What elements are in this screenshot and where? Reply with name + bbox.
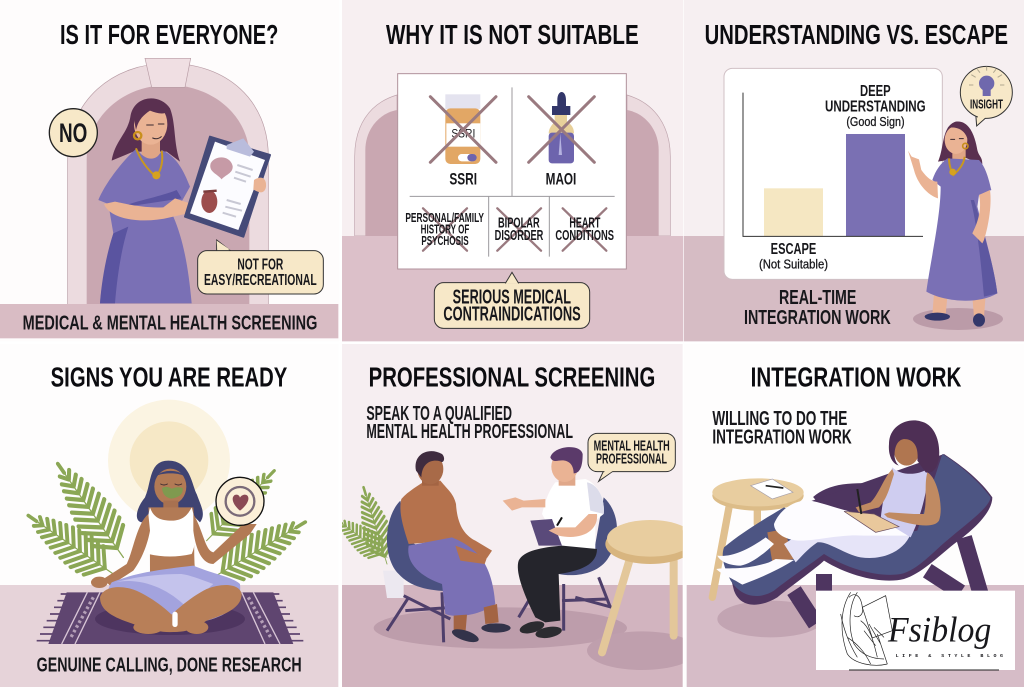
floor xyxy=(342,236,683,341)
panel: understanding vs escape xyxy=(684,0,1024,341)
crossed out: personal family history of psychosis: PSYCHOSIS xyxy=(421,234,469,248)
heading: integration work: INTEGRATION WORK xyxy=(751,361,962,392)
side table with notebook xyxy=(712,478,804,597)
caption bar: medical and mental health screening xyxy=(0,304,338,338)
crossed out: heart conditions: CONDITIONS xyxy=(555,228,614,244)
arch doorway xyxy=(68,58,268,305)
panel: professional screening xyxy=(330,344,697,687)
potted plant xyxy=(342,486,404,598)
crossed out: personal family history of psychosis: HISTORY OF xyxy=(421,222,470,236)
callout: mental health professional xyxy=(588,433,675,481)
crossed out: bipolar disorder: BIPOLAR xyxy=(498,215,540,231)
callout: serious medical contraindications xyxy=(434,272,590,328)
icon: no badge xyxy=(49,109,97,157)
caption: genuine calling, done research: GENUINE CALLING, DONE RESEARCH xyxy=(37,654,302,676)
panel: why it is not suitable xyxy=(342,0,683,341)
panel: integration work xyxy=(684,344,1024,687)
logo line art xyxy=(841,592,999,670)
subheading: willing to do the integration work: WILLING TO DO THE xyxy=(712,408,847,430)
panel: is it for everyone xyxy=(0,0,339,341)
icon: crossed out SSRI bottle: SSRI xyxy=(451,126,475,140)
subheading: speak to a qualified professional: SPEAK TO A QUALIFIED xyxy=(366,403,512,425)
label: escape: (Not Suitable) xyxy=(759,257,828,271)
woman holding clipboard xyxy=(98,98,270,303)
icon: insight lightbulb bubble xyxy=(960,66,1012,126)
bar chart card xyxy=(724,68,942,279)
callout: not for easy recreational: NOT FOR xyxy=(237,256,284,273)
crossed out: personal family history of psychosis: PERSONAL/FAMILY xyxy=(405,211,484,225)
therapist with clipboard xyxy=(503,447,617,640)
label: escape: ESCAPE xyxy=(771,241,817,258)
callout: serious medical contraindications: SERIOUS MEDICAL xyxy=(453,286,571,308)
woman journaling xyxy=(716,420,941,585)
icon: no badge: NO xyxy=(59,118,87,148)
floor xyxy=(687,585,1024,687)
sun halo xyxy=(108,400,230,522)
heading: professional screening: PROFESSIONAL SCREENING xyxy=(369,361,655,392)
crossed out: bipolar disorder xyxy=(495,208,544,251)
woman pointing at chart xyxy=(908,121,1003,330)
caption bar: medical and mental health screening: MEDICAL & MENTAL HEALTH SCREENING xyxy=(23,312,317,334)
caption: real-time integration work: INTEGRATION WORK xyxy=(744,307,891,329)
floor and shadows xyxy=(342,585,697,687)
side arches xyxy=(355,95,670,236)
logo tagline: LIFE & STYLE BLOG xyxy=(896,653,1003,659)
label: MAOI: MAOI xyxy=(546,169,576,188)
callout: not for easy recreational xyxy=(198,240,323,294)
label: deep understanding: UNDERSTANDING xyxy=(825,99,926,116)
subheading: willing to do the integration work: INTEGRATION WORK xyxy=(712,426,852,448)
label: SSRI: SSRI xyxy=(449,169,477,188)
caption: real-time integration work xyxy=(744,287,891,329)
patterned rug xyxy=(37,592,303,644)
crossed out: bipolar disorder: DISORDER xyxy=(495,228,544,244)
woman meditating xyxy=(91,461,257,635)
contraindications card xyxy=(398,74,626,269)
subheading: willing to do the integration work xyxy=(712,408,852,448)
subheading: speak to a qualified professional xyxy=(366,406,573,438)
subheading: speak to a qualified professional: MENTAL HEALTH PROFESSIONAL xyxy=(366,421,573,443)
label: deep understanding: DEEP xyxy=(860,83,891,100)
label: deep understanding xyxy=(825,83,926,129)
crossed out: personal family history of psychosis xyxy=(405,208,484,251)
bar: escape xyxy=(764,188,823,236)
heading: signs you are ready: SIGNS YOU ARE READY xyxy=(51,361,287,392)
callout: not for easy recreational: EASY/RECREATIONAL xyxy=(204,272,317,289)
caption: real-time integration work: REAL-TIME xyxy=(779,287,856,309)
icon: insight lightbulb bubble: INSIGHT xyxy=(970,97,1003,111)
heading: is it for everyone: IS IT FOR EVERYONE? xyxy=(60,19,278,50)
label: deep understanding: (Good Sign) xyxy=(846,115,905,129)
icon: heart compass badge xyxy=(216,477,264,525)
bar: deep understanding xyxy=(846,134,905,236)
icon: crossed out MAOI dropper xyxy=(529,92,594,163)
panel: signs you are ready xyxy=(0,344,338,687)
heading: why it is not suitable: WHY IT IS NOT SUITABLE xyxy=(386,19,639,50)
round wooden table xyxy=(602,520,695,652)
crossed out: heart conditions xyxy=(555,208,614,251)
label: escape xyxy=(759,241,828,271)
logo: fsiblog xyxy=(816,591,1015,670)
palm fronds xyxy=(18,453,315,593)
lounge chair xyxy=(723,454,992,624)
patient in chair xyxy=(387,451,511,645)
floor xyxy=(0,585,338,687)
callout: mental health professional: MENTAL HEALTH xyxy=(594,439,670,455)
floor xyxy=(684,236,1024,341)
crossed out: heart conditions: HEART xyxy=(569,215,600,231)
logo wordmark: Fsiblog xyxy=(887,609,991,649)
icon: crossed out SSRI bottle xyxy=(430,94,496,164)
callout: serious medical contraindications: CONTRAINDICATIONS xyxy=(443,304,581,326)
callout: mental health professional: PROFESSIONAL xyxy=(596,451,667,467)
